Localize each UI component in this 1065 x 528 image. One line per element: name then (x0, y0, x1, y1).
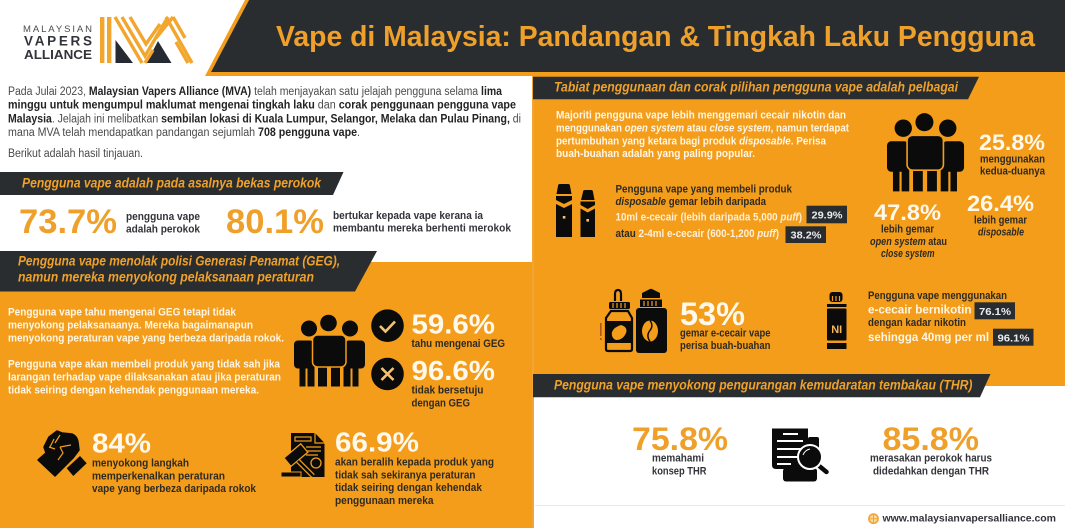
section heading: usage habits: Tabiat penggunaan dan corak pilihan pengguna vape adalah pelbagai (554, 80, 958, 95)
stat: 73.7% (19, 203, 201, 241)
stat: 66.9%: penggunaan mereka (335, 495, 434, 507)
icon: nicotine bottle: NI (831, 324, 842, 336)
disposable text block: Pengguna vape yang membeli produk (616, 183, 793, 195)
usage text block: menggunakan open system atau close system, namun terdapat (556, 122, 849, 134)
stat: 26.4% (967, 191, 1034, 238)
stat: 73.7%: 73.7% (19, 203, 117, 241)
stat: 53% (680, 296, 771, 352)
stat: 66.9%: 66.9% (335, 426, 419, 457)
stat: 53%: perisa buah-buahan (680, 340, 771, 352)
icon: group of people large (887, 113, 964, 191)
stat: 84%: 84% (92, 427, 151, 458)
icon: group of people (294, 315, 365, 386)
badge: 96.1% (993, 329, 1034, 346)
stat: 85.8%: didedahkan dengan THR (873, 466, 989, 478)
stat: 53%: gemar e-cecair vape (680, 328, 770, 340)
header banner (205, 0, 1065, 76)
stat: 75.8% (632, 421, 728, 478)
stat: 26.4%: 26.4% (967, 191, 1034, 216)
intro text block: Berikut adalah hasil tinjauan. (8, 148, 143, 160)
stat: 85.8%: merasakan perokok harus (870, 453, 992, 465)
logo: Malaysian Vapers Alliance: VAPERS (24, 34, 92, 48)
badge: 96.1%: 96.1% (998, 332, 1030, 344)
intro text block: Malaysia. Jelajah ini melibatkan sembilan lokasi di Kuala Lumpur, Selangor, Melaka dan Pulau Pinang, di (8, 113, 521, 125)
logo: Malaysian Vapers Alliance (23, 17, 192, 63)
intro text block: mana MVA telah mendapatkan pandangan sejumlah 708 pengguna vape. (8, 127, 360, 139)
logo: Malaysian Vapers Alliance: ALLIANCE (24, 48, 92, 62)
usage text block: Majoriti pengguna vape lebih menggemari cecair nikotin dan (556, 109, 846, 121)
stat: 25.8%: 25.8% (979, 130, 1045, 155)
stat: 66.9% (335, 426, 494, 507)
disposable text block: atau 2-4ml e-cecair (600-1,200 puff) (616, 228, 779, 240)
nicotine text block: Pengguna vape menggunakan (868, 290, 1007, 302)
icon: e-liquid bottles (600, 289, 667, 353)
icon: disposable vapes (556, 184, 595, 237)
stat: 75.8%: 75.8% (632, 421, 728, 457)
stat: 73.7%: pengguna vape (126, 211, 200, 223)
intro text block: minggu untuk mengumpul maklumat mengenai tingkah laku dan corak penggunaan pengguna vape (8, 100, 516, 112)
stat: 47.8% (870, 200, 947, 260)
section heading: usage habits (533, 77, 979, 99)
section heading: ex-smokers: Pengguna vape adalah pada asalnya bekas perokok (22, 176, 322, 191)
website footer: www.malaysianvapersalliance.com (882, 513, 1056, 525)
badge: 76.1%: 76.1% (979, 306, 1012, 318)
GEG text block: tidak seiring dengan kehendak penggunaan mereka. (8, 384, 259, 396)
stat: 25.8% (979, 130, 1046, 178)
stat: 96.6%: dengan GEG (412, 397, 470, 409)
disposable text block: 10ml e-cecair (lebih daripada 5,000 puff) (616, 212, 802, 224)
section heading: GEG: Pengguna vape menolak polisi Generasi Penamat (GEG), (18, 254, 340, 268)
stat: 47.8%: close system (881, 248, 935, 260)
stat: 66.9%: akan beralih kepada produk yang (335, 456, 494, 468)
icon: clasped fist (38, 431, 87, 476)
stat: 84%: menyokong langkah (92, 457, 189, 469)
stat: 59.6%: tahu mengenai GEG (412, 338, 505, 350)
nicotine text block (868, 290, 1034, 346)
stat: 47.8%: open system atau (870, 236, 947, 248)
disposable text block (616, 183, 847, 243)
stat: 47.8%: lebih gemar (881, 224, 935, 236)
badge: 29.9% (806, 206, 847, 223)
stat: 66.9%: tidak seiring dengan kehendak (335, 482, 483, 494)
GEG text block (8, 307, 284, 396)
section heading: GEG (0, 251, 377, 292)
GEG text block: menyokong pelaksanaanya. Mereka bagaimanapun (8, 320, 253, 332)
stat: 47.8%: 47.8% (874, 200, 941, 225)
badge: 29.9%: 29.9% (812, 210, 843, 222)
icon: gavel and document (281, 433, 324, 477)
stat: 80.1%: membantu mereka berhenti merokok (333, 222, 512, 234)
nicotine text block: e-cecair bernikotin (868, 303, 972, 317)
usage text block (556, 109, 849, 160)
stat: 85.8% (870, 421, 992, 478)
stat: 80.1%: bertukar kepada vape kerana ia (333, 210, 484, 222)
disposable text block: disposable gemar lebih daripada (616, 196, 767, 208)
badge: 38.2%: 38.2% (790, 230, 822, 242)
stat: 84% (92, 427, 257, 495)
GEG text block: Pengguna vape akan membeli produk yang tidak sah jika (8, 358, 281, 370)
section heading: THR: Pengguna vape menyokong pengurangan kemudaratan tembakau (THR) (554, 378, 973, 393)
section heading: ex-smokers (0, 172, 344, 195)
badge: 38.2% (786, 226, 826, 243)
icon: document with magnifier (772, 428, 826, 482)
stat: 80.1% (226, 203, 512, 241)
intro text block (8, 86, 521, 160)
stat: 73.7%: adalah perokok (126, 224, 201, 236)
icon: globe (869, 514, 878, 523)
stat: 26.4%: lebih gemar (974, 215, 1028, 227)
GEG text block: larangan terhadap vape dilaksanakan atau jika peraturan (8, 371, 281, 383)
usage text block: pertumbuhan yang ketara bagi produk disposable. Perisa (556, 135, 827, 147)
nicotine text block: sehingga 40mg per ml (868, 330, 989, 344)
nicotine text block: dengan kadar nikotin (868, 317, 966, 329)
panel: usage habits orange background (533, 76, 1065, 386)
logo: Malaysian Vapers Alliance: MALAYSIAN (23, 24, 92, 35)
stat: 66.9%: tidak sah sekiranya peraturan (335, 469, 476, 481)
badge: 76.1% (974, 302, 1015, 319)
intro text block: Pada Julai 2023, Malaysian Vapers Alliance (MVA) telah menjayakan satu jelajah pengguna selama lima (8, 86, 503, 98)
title: Vape di Malaysia: Pandangan & Tingkah Laku Pengguna (276, 21, 1036, 53)
stat: 25.8%: kedua-duanya (980, 166, 1046, 178)
stat: 84%: memperkenalkan peraturan (92, 470, 225, 482)
stat: 53%: 53% (680, 296, 745, 332)
stat: 85.8%: 85.8% (882, 421, 979, 457)
panel: GEG orange background (0, 262, 533, 528)
stat: 59.6% (412, 308, 505, 350)
section heading: GEG: namun mereka menyokong pelaksanaan peraturan (18, 269, 314, 284)
icon: check circle (371, 309, 404, 342)
stat: 26.4%: disposable (978, 226, 1024, 238)
stat: 75.8%: memahami (652, 453, 704, 465)
stat: 75.8%: konsep THR (652, 466, 707, 478)
stat: 96.6%: tidak bersetuju (412, 385, 484, 397)
usage text block: buah-buahan adalah yang paling popular. (556, 148, 755, 160)
icon: nicotine bottle (827, 292, 846, 349)
stat: 84%: vape yang berbeza daripada rokok (92, 483, 257, 495)
stat: 25.8%: menggunakan (980, 154, 1045, 166)
stat: 96.6% (412, 355, 495, 409)
GEG text block: Pengguna vape tahu mengenai GEG tetapi tidak (8, 307, 237, 319)
stat: 80.1%: 80.1% (226, 203, 324, 241)
section heading: THR (533, 374, 990, 397)
icon: cross circle (371, 358, 404, 390)
stat: 96.6%: 96.6% (412, 355, 495, 386)
GEG text block: menyokong peraturan vape yang berbeza daripada rokok. (8, 333, 284, 345)
stat: 59.6%: 59.6% (412, 308, 495, 339)
